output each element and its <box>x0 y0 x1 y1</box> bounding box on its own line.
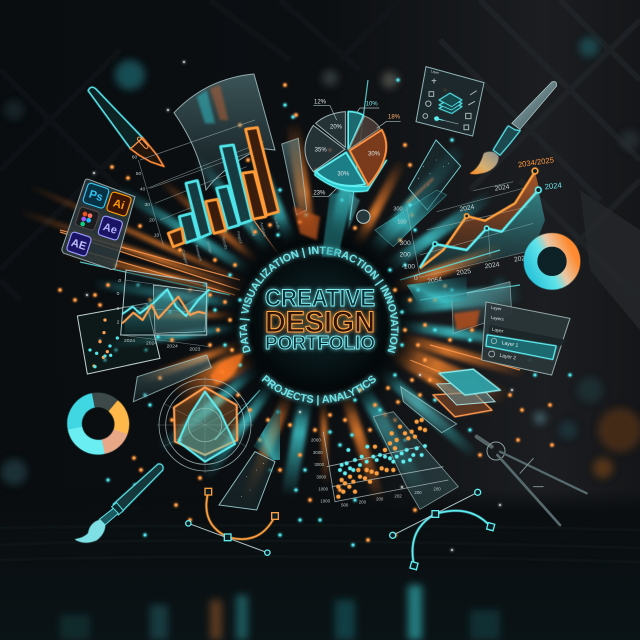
teal bars <box>179 145 252 243</box>
icon: Ps: Ps <box>87 188 104 204</box>
bar labels: Analysis <box>259 222 268 237</box>
glass orb <box>357 210 370 223</box>
line chart panel left: 2024 <box>124 338 135 344</box>
pie labels: 12% <box>314 99 327 105</box>
glass shard diagonal <box>401 387 457 433</box>
slice orange 30 <box>350 130 386 185</box>
chart labels: 300 <box>393 207 403 213</box>
chart labels: 300 <box>400 240 411 247</box>
line chart panel left: 2023 <box>189 347 201 353</box>
app icons panel <box>62 179 135 269</box>
layers list panel <box>482 302 570 375</box>
line chart panel left: 0 <box>118 278 121 284</box>
line chart panel left <box>117 270 210 353</box>
bottom-right region <box>311 277 587 570</box>
chart labels: 2034/2025 <box>517 155 554 169</box>
chart labels: 100 <box>397 219 407 225</box>
icon: stylus pen <box>88 87 163 166</box>
radar teal outline <box>178 392 235 462</box>
scatter plot <box>311 412 458 509</box>
layered stack icon <box>439 93 462 113</box>
tool icons <box>423 79 477 130</box>
scatter labels: 200 <box>376 497 384 502</box>
scatter labels: 2000 <box>311 438 321 443</box>
axis labels: 10 <box>154 233 160 239</box>
chart labels: 2024 <box>494 184 510 193</box>
layers panel <box>416 67 484 136</box>
scatter orange dots <box>338 420 425 497</box>
scatter teal dots <box>340 446 425 473</box>
panel rows text <box>490 305 519 362</box>
left-top region <box>62 74 320 269</box>
chart labels: -100 <box>402 263 415 270</box>
floor with reflections <box>0 490 640 640</box>
pie leader lines <box>312 106 401 197</box>
axis labels: 40 <box>140 187 146 193</box>
central title <box>265 285 375 353</box>
line chart panel left: 0 <box>117 306 120 312</box>
slice teal 30 <box>316 153 365 186</box>
pie labels: 35% <box>315 147 327 153</box>
glass shard: curved top panel <box>174 74 275 190</box>
line chart panel left: 2024 <box>167 343 178 349</box>
icon: drafting compass <box>477 437 587 525</box>
bar labels: Design <box>206 241 214 254</box>
scatter labels: 200 <box>359 499 367 504</box>
ring text top: DATA | VISUALIZATION | INTERACTION | INNOVATION <box>236 243 402 356</box>
slice 20 <box>316 112 345 147</box>
pie labels: 20% <box>330 124 343 130</box>
teal line <box>420 190 538 267</box>
icon: paint brush bottom left <box>75 464 163 542</box>
scatter labels: 200 <box>433 487 441 492</box>
radar orange outline <box>174 387 237 455</box>
pie labels: 30% <box>368 151 381 157</box>
line chart panel left: 2 <box>117 319 120 325</box>
stacked layers icon <box>433 369 500 417</box>
donut chart right <box>531 240 573 283</box>
pie labels: 10% <box>366 102 378 108</box>
bar labels: Growth <box>273 216 281 229</box>
ring text bottom: PROJECTS | ANALYTICS <box>259 372 379 408</box>
slice 10 <box>348 112 363 149</box>
scatter panel left <box>77 303 160 374</box>
bar labels: Category <box>181 249 190 266</box>
pie labels: 23% <box>313 191 326 197</box>
scatter labels: 200 <box>414 490 422 495</box>
chart axes and gridlines <box>138 120 263 245</box>
bezier curve teal <box>390 489 495 570</box>
chart markers <box>433 168 541 246</box>
ring title: circular text <box>236 243 402 408</box>
scatter labels <box>311 438 441 508</box>
grid and axes <box>407 182 533 277</box>
axis labels: 30 <box>144 202 150 208</box>
scatter axes <box>323 432 448 502</box>
line chart panel left: 0 <box>117 291 120 297</box>
line chart top right <box>393 155 563 285</box>
scatter labels: 3000 <box>313 450 323 455</box>
icon: Figma <box>75 206 100 231</box>
top-right region <box>305 67 573 285</box>
bar labels: Research <box>194 244 203 262</box>
radar rings <box>157 377 253 473</box>
axis labels: 20 <box>149 218 155 224</box>
slice 35 <box>305 125 345 172</box>
panel rows text: Layer <box>490 305 503 312</box>
line chart panel left: 2024 <box>146 341 157 347</box>
chart labels: 2024 <box>459 204 475 213</box>
panel rows text: Layer 1 <box>501 340 519 349</box>
scatter labels: 1000 <box>320 499 331 504</box>
area fills <box>420 172 540 268</box>
orange bars <box>168 128 278 247</box>
chart labels: 202 <box>514 255 526 264</box>
icon: paint brush top right <box>470 81 557 174</box>
scatter labels: 500 <box>341 503 349 508</box>
pie chart <box>305 99 401 197</box>
scatter labels: 1000 <box>318 487 329 492</box>
bar labels: Visual <box>249 225 257 237</box>
axis labels: 50 <box>136 171 142 177</box>
chart labels: 2054 <box>427 276 443 285</box>
pie labels: 18% <box>388 115 401 121</box>
glass shard lower left <box>133 353 243 402</box>
chart labels: 2024 <box>544 181 563 191</box>
chart labels: 2025 <box>456 268 472 277</box>
pie labels: 30% <box>337 171 350 177</box>
title line: creative: CREATIVE <box>265 285 375 312</box>
icon: AE: AE <box>70 237 88 253</box>
scatter labels: 3000 <box>314 462 325 467</box>
chart labels: 2024 <box>484 261 500 270</box>
orange line <box>420 172 535 268</box>
bar chart <box>132 120 281 266</box>
donut chart left <box>75 400 122 447</box>
title line: design: DESIGN <box>265 306 375 339</box>
bar labels: Project <box>236 231 244 245</box>
pie labels <box>313 99 401 197</box>
panel rows text: Layers <box>490 315 504 322</box>
glass shard: narrow right panel <box>282 138 320 240</box>
axis labels: 60 <box>132 155 138 161</box>
bar labels <box>181 216 281 266</box>
radial light rays <box>16 80 534 503</box>
icon: Ai: Ai <box>111 197 126 212</box>
teal glass streak under pie <box>322 193 360 257</box>
chart labels: 200 <box>400 252 411 259</box>
slider <box>434 117 458 124</box>
chart labels <box>393 155 563 285</box>
bar labels: Results <box>221 236 229 250</box>
icon: Ae: Ae <box>101 221 119 237</box>
radar chart <box>157 377 253 473</box>
panel rows text: Layer <box>491 327 504 334</box>
chart labels: 0 <box>414 275 418 282</box>
bezier curve orange <box>186 488 278 555</box>
title line: portfolio: PORTFOLIO <box>265 333 375 353</box>
panel rows text: Layer 2 <box>499 353 517 362</box>
scatter labels: 202 <box>394 493 402 498</box>
glass shard behind layer panel <box>407 277 512 333</box>
axis labels <box>132 155 160 239</box>
bottom-left region <box>75 270 280 555</box>
glass shard lower middle <box>219 403 280 510</box>
layers panel: Layer <box>430 69 440 75</box>
scatter labels: 3000 <box>316 474 327 479</box>
particles <box>60 62 570 550</box>
glass shard with particles <box>375 140 461 247</box>
slice 15 <box>349 116 380 149</box>
